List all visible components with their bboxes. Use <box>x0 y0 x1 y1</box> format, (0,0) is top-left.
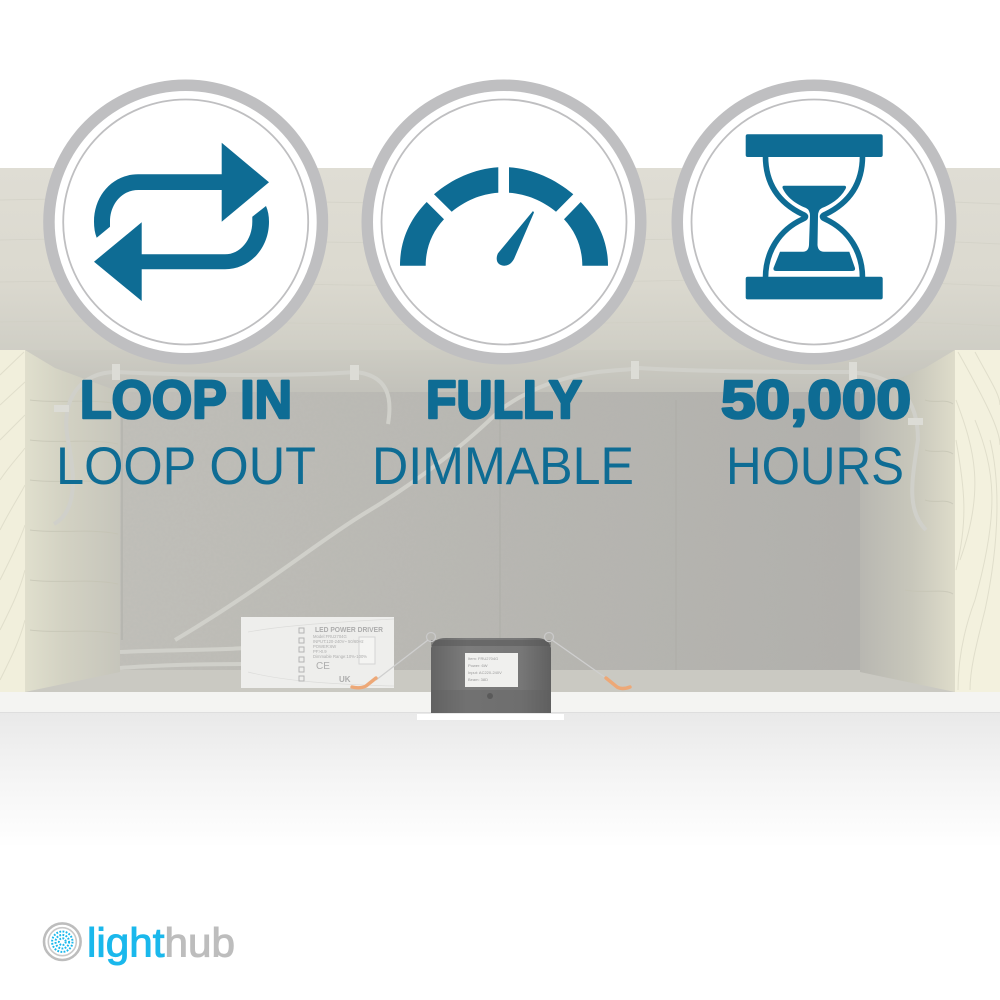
right joist end <box>955 350 1000 692</box>
driver label text: CE <box>316 661 330 672</box>
icon: loop arrows <box>94 143 269 301</box>
label: loop in loop out: LOOP OUT <box>56 437 316 496</box>
LED power driver <box>241 617 394 688</box>
badge: fully dimmable <box>362 80 646 364</box>
white cables and clips <box>54 368 926 668</box>
left side wall <box>25 350 120 692</box>
downlight label: Input: AC220-240V <box>468 670 502 675</box>
driver label text: Model:FRU2704G <box>313 634 347 639</box>
label: 50,000 hours <box>721 370 911 496</box>
beam underside <box>0 350 1000 394</box>
icon: dimmer gauge <box>400 167 608 266</box>
badge: 50,000 hours <box>672 80 956 364</box>
driver label text <box>313 627 383 684</box>
plasterboard <box>0 692 1000 713</box>
label: fully dimmable: DIMMABLE <box>372 437 634 496</box>
logo wordmark: lighthub <box>87 920 235 966</box>
driver label text: Dimmable Range:10%-100% <box>313 654 367 659</box>
driver label text: PF>0.9 <box>313 649 327 654</box>
badge: loop in loop out <box>43 80 328 364</box>
timber beam <box>0 168 1000 353</box>
label: 50,000 hours: HOURS <box>726 437 904 496</box>
driver terminal symbols <box>299 628 375 681</box>
label: fully dimmable: FULLY <box>426 370 582 430</box>
driver label text: POWER:6W <box>313 644 336 649</box>
logo: lighthub <box>44 920 235 966</box>
driver label text: LED POWER DRIVER <box>315 627 383 634</box>
driver label text: INPUT:120-240V~ 50/60Hz <box>313 639 364 644</box>
driver label text: UK <box>339 675 351 684</box>
background: ceiling void scene <box>0 168 1000 848</box>
trim flange <box>417 714 564 720</box>
recessed downlight <box>352 632 630 720</box>
downlight label: Power: 6W <box>468 663 488 668</box>
label: loop in loop out <box>56 370 316 496</box>
downlight label <box>465 653 518 687</box>
ceiling underside shading <box>0 713 1000 848</box>
left joist end <box>0 350 25 692</box>
downlight label: Beam: 38D <box>468 677 488 682</box>
label: 50,000 hours: 50,000 <box>721 370 911 430</box>
back wall insulation <box>120 392 860 672</box>
spring clip right <box>544 632 630 688</box>
floor band <box>25 670 955 693</box>
right side wall <box>860 350 955 692</box>
label: fully dimmable <box>372 370 634 496</box>
label: loop in loop out: LOOP IN <box>80 370 292 430</box>
downlight can <box>431 638 551 713</box>
icon: hourglass <box>746 134 883 299</box>
downlight label: Item: FRU2704G <box>468 656 498 661</box>
logo mark <box>44 923 81 960</box>
spring clip left <box>352 632 436 688</box>
